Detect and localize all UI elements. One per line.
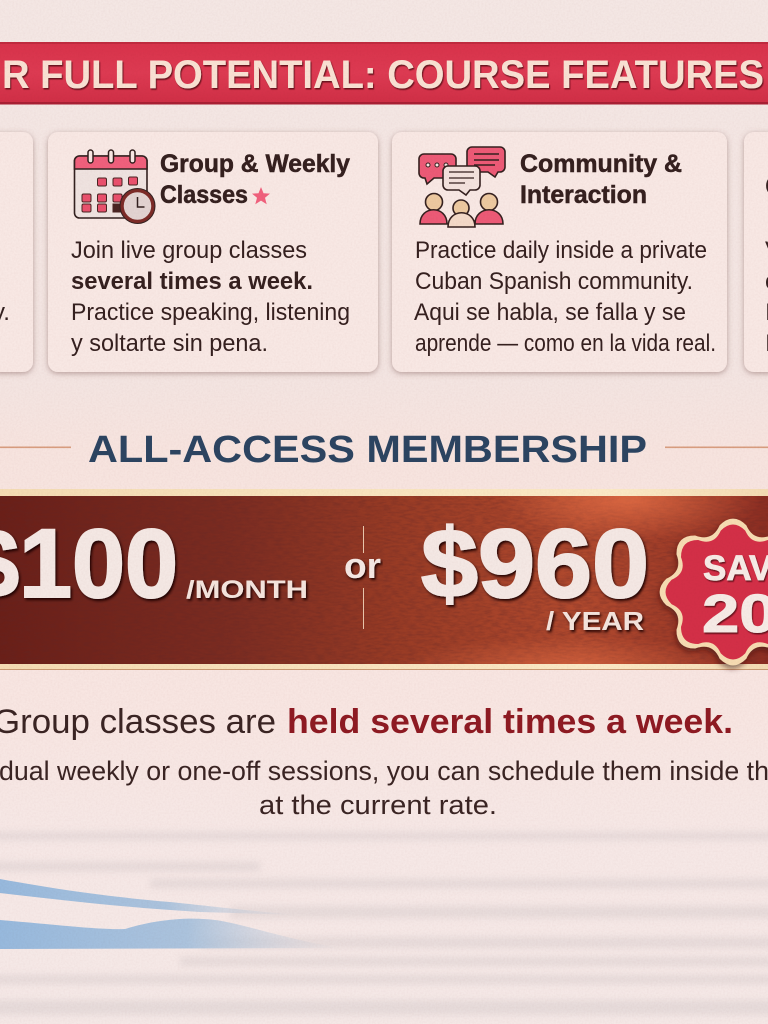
card body text: y soltarte sin pena. bbox=[71, 330, 268, 357]
icon: chat bubbles and people bbox=[419, 147, 505, 227]
card body text: Cuban Spanish community. bbox=[415, 268, 693, 295]
schedule note details: at the current rate. bbox=[259, 790, 497, 820]
schedule note headline: held several times a week. bbox=[287, 703, 733, 741]
blue brush strokes bbox=[0, 879, 340, 949]
yearly price: / YEAR bbox=[546, 606, 644, 636]
schedule note details bbox=[0, 756, 768, 820]
schedule note headline bbox=[0, 703, 733, 741]
yearly price: $960 bbox=[421, 509, 649, 618]
card: community and interaction bbox=[392, 132, 727, 372]
schedule note headline: Group classes are bbox=[0, 703, 276, 741]
card body text: Join live group classes bbox=[71, 237, 307, 264]
monthly price: /MONTH bbox=[186, 576, 308, 604]
card heading bbox=[520, 150, 682, 209]
card: group and weekly classes bbox=[48, 132, 378, 372]
card heading: Interaction bbox=[520, 181, 647, 209]
card body text bbox=[71, 237, 350, 357]
card body text bbox=[414, 237, 716, 357]
card body text: aprende — como en la vida real. bbox=[415, 330, 716, 357]
pricing panel bbox=[0, 489, 768, 672]
or divider bbox=[344, 526, 381, 629]
or divider: or bbox=[344, 545, 381, 586]
schedule note details: dual weekly or one-off sessions, you can schedule them inside th bbox=[0, 756, 768, 786]
monthly price bbox=[0, 509, 308, 618]
card body text: several times a week. bbox=[71, 268, 313, 295]
card heading: Group & Weekly bbox=[160, 150, 350, 178]
card heading: Classes bbox=[160, 181, 248, 209]
card heading: Community & bbox=[520, 150, 682, 178]
icon: calendar with clock bbox=[74, 150, 155, 224]
card body text: Practice daily inside a private bbox=[415, 237, 707, 264]
icon: star bbox=[252, 187, 270, 204]
membership heading: ALL-ACCESS MEMBERSHIP bbox=[88, 429, 647, 471]
card body text: Practice speaking, listening bbox=[71, 299, 350, 326]
card: partial left bbox=[0, 132, 33, 372]
card body text: Aqui se habla, se falla y se bbox=[414, 299, 686, 326]
card heading bbox=[160, 150, 350, 209]
card: partial right bbox=[744, 132, 768, 372]
savings badge bbox=[660, 519, 768, 665]
